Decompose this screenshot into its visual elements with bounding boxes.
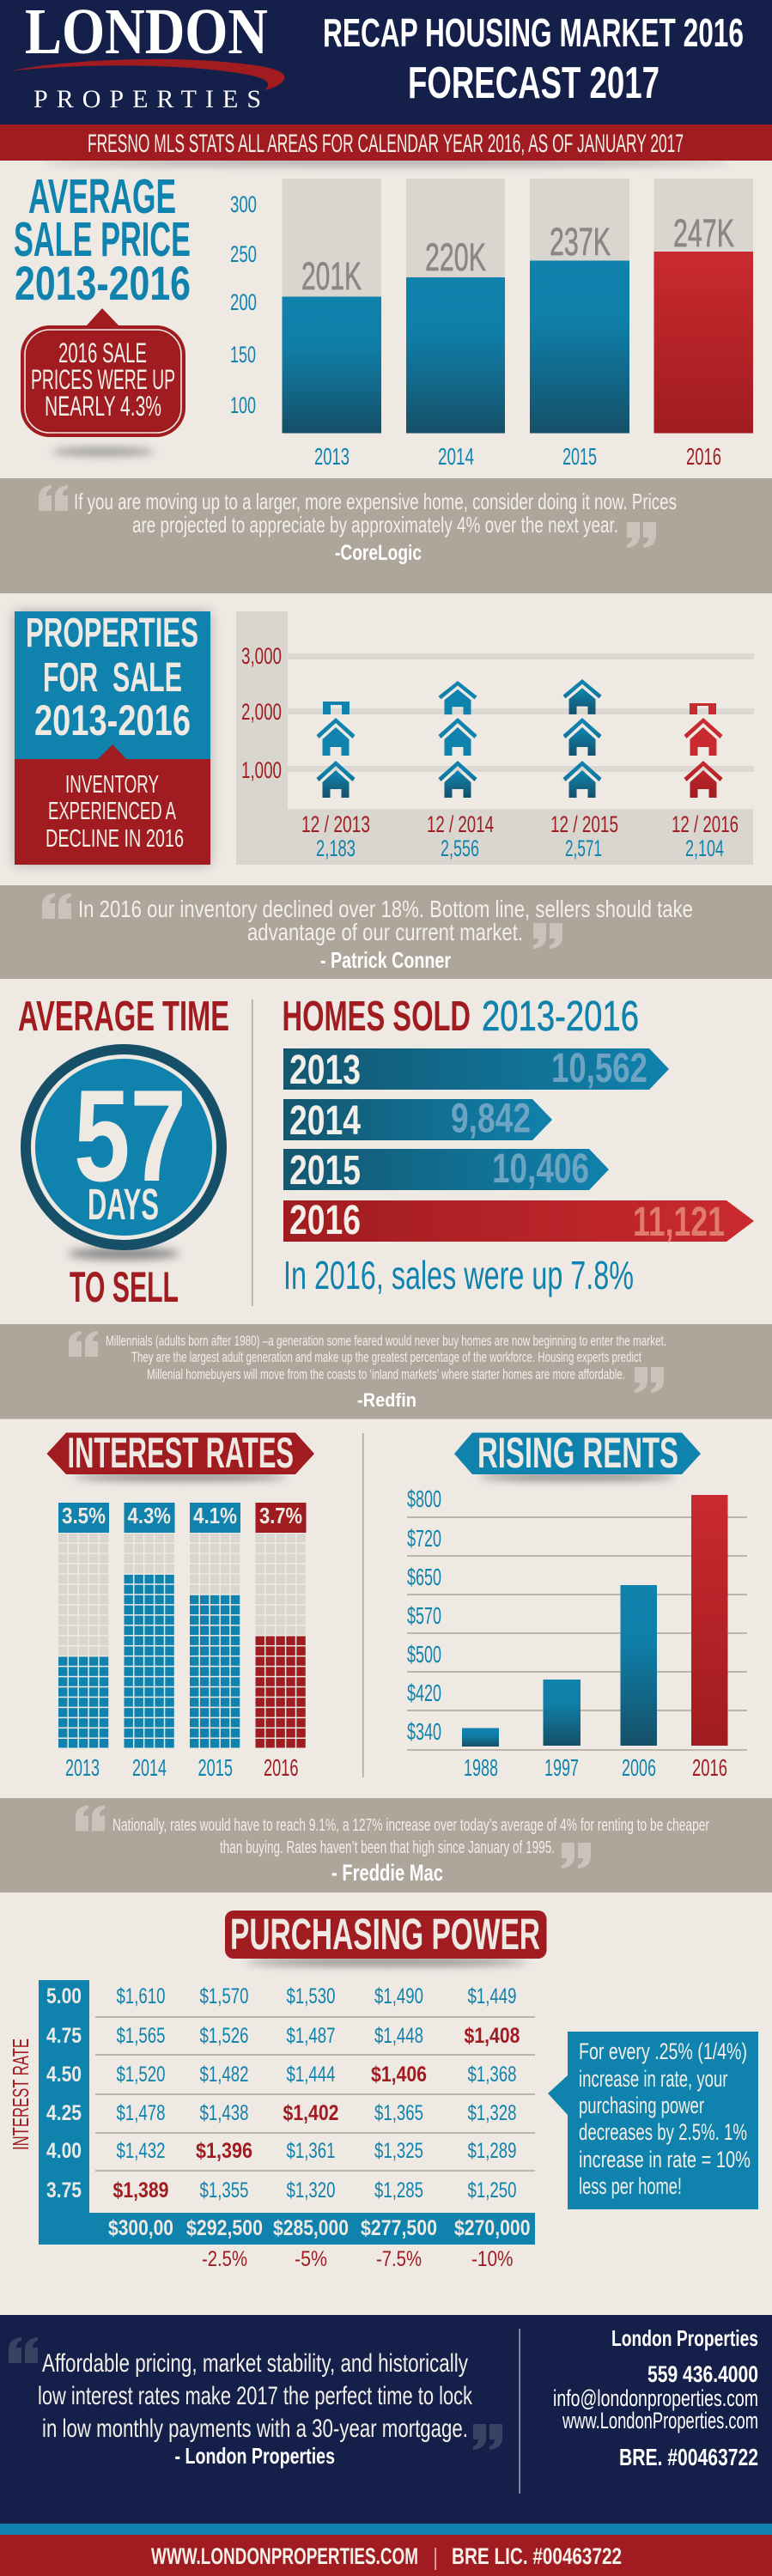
table: purchasing power: -7.5% bbox=[376, 2247, 422, 2271]
arrow bar: 2013 bbox=[283, 1046, 669, 1093]
bar chart: rents: 1997 bbox=[544, 1754, 579, 1781]
title bbox=[323, 10, 744, 108]
panel: interest rates: 2013 bbox=[65, 1754, 100, 1781]
icon: houses 2015 bbox=[563, 679, 601, 798]
footer bar: website and licence bbox=[0, 2535, 772, 2576]
table: purchasing power: $1,250 bbox=[467, 2178, 517, 2202]
footer bar: website and licence: WWW.LONDONPROPERTIES.COM bbox=[151, 2543, 418, 2569]
table: purchasing power: $1,361 bbox=[287, 2139, 335, 2163]
panel: homes sold: In 2016, sales were up 7.8% bbox=[283, 1253, 634, 1297]
box: properties for sale heading: DECLINE IN 2016 bbox=[46, 825, 184, 853]
quote: London Properties bbox=[9, 2337, 502, 2469]
table: purchasing power: $1,565 bbox=[117, 2024, 165, 2048]
panel: average time to sell: AVERAGE TIME bbox=[18, 993, 229, 1040]
callout: 2016 sale prices bbox=[21, 308, 185, 456]
quote: Redfin: -Redfin bbox=[357, 1389, 416, 1411]
waffle chart: 2016 bbox=[256, 1534, 306, 1748]
box: properties for sale heading: PROPERTIES bbox=[26, 611, 198, 656]
bar chart: rents: $420 bbox=[407, 1680, 441, 1706]
callout: rate rule: purchasing power bbox=[579, 2093, 704, 2118]
table: purchasing power: $1,610 bbox=[117, 1984, 165, 2008]
footer panel bbox=[0, 2315, 772, 2524]
rate labels: 4.1% bbox=[193, 1503, 237, 1528]
table: purchasing power: $1,482 bbox=[199, 2063, 249, 2087]
quote: London Properties: - London Properties bbox=[175, 2443, 335, 2469]
quote: Freddie Mac: - Freddie Mac bbox=[331, 1860, 443, 1886]
callout: rate rule bbox=[548, 2032, 758, 2209]
panel: interest rates bbox=[46, 1429, 314, 1781]
quote: Patrick Conner: - Patrick Conner bbox=[320, 947, 451, 973]
quote: London Properties: low interest rates make 2017 the perfect time to lock bbox=[38, 2382, 473, 2410]
table: purchasing power: $1,389 bbox=[113, 2178, 168, 2202]
arrow bar: 2016: 2016 bbox=[289, 1198, 361, 1243]
pictogram chart: inventory: 12 / 2016 bbox=[672, 811, 739, 837]
icon: houses 2016 bbox=[684, 703, 723, 798]
panel: purchasing power bbox=[8, 1910, 758, 2271]
box: properties for sale heading bbox=[15, 611, 210, 865]
rate labels: 3.5% bbox=[62, 1503, 106, 1528]
table: purchasing power: -2.5% bbox=[202, 2247, 247, 2271]
pictogram chart: inventory bbox=[236, 611, 754, 865]
panel: average time to sell: TO SELL bbox=[70, 1263, 179, 1311]
bar chart: average sale price: 2014 bbox=[438, 443, 474, 470]
table: purchasing power: $1,490 bbox=[374, 1984, 423, 2008]
table: purchasing power: $1,289 bbox=[467, 2139, 517, 2163]
pictogram chart: inventory: 2,104 bbox=[685, 835, 724, 861]
arrow bar: 2014: 9,842 bbox=[451, 1096, 531, 1142]
table: purchasing power: $1,570 bbox=[199, 1984, 249, 2008]
table: purchasing power: $1,355 bbox=[199, 2178, 249, 2202]
bar chart: average sale price: 300 bbox=[230, 191, 257, 217]
icon: houses 2013 bbox=[316, 702, 356, 798]
panel: interest rates: 2015 bbox=[198, 1754, 233, 1781]
heading: purchasing power: PURCHASING POWER bbox=[230, 1910, 540, 1959]
arrow bar: 2014 bbox=[283, 1096, 552, 1144]
bar chart: average sale price: 150 bbox=[230, 342, 256, 368]
quote: London Properties: Affordable pricing, market stability, and historically bbox=[42, 2349, 468, 2378]
table: purchasing power: $1,406 bbox=[371, 2063, 427, 2087]
contact details bbox=[553, 2325, 758, 2470]
box: properties for sale heading: 2013-2016 bbox=[34, 696, 191, 744]
arrow bar: 2013: 10,562 bbox=[551, 1046, 647, 1091]
waffle chart: 2014 bbox=[124, 1534, 175, 1748]
table: purchasing power: $1,328 bbox=[467, 2101, 517, 2125]
table: purchasing power: $1,478 bbox=[117, 2101, 165, 2125]
table: purchasing power: $1,285 bbox=[374, 2178, 423, 2202]
bar chart: average sale price: 247K bbox=[673, 211, 734, 255]
table: purchasing power: $1,530 bbox=[287, 1984, 335, 2008]
pictogram chart: inventory: 12 / 2015 bbox=[550, 811, 618, 837]
arrow bar: 2013: 2013 bbox=[289, 1048, 361, 1093]
bar chart: average sale price: 250 bbox=[230, 241, 257, 267]
panel: homes sold bbox=[282, 993, 754, 1297]
table: purchasing power: -5% bbox=[295, 2247, 327, 2271]
table: purchasing power: $1,520 bbox=[117, 2063, 165, 2087]
bar chart: rents: $340 bbox=[407, 1718, 441, 1745]
pictogram chart: inventory: 3,000 bbox=[241, 643, 282, 669]
banner: interest rates bbox=[46, 1429, 314, 1480]
banner: interest rates: INTEREST RATES bbox=[67, 1429, 294, 1477]
heading: homes sold: HOMES SOLD bbox=[282, 993, 471, 1040]
header bbox=[0, 0, 772, 125]
table: purchasing power: $1,487 bbox=[287, 2024, 335, 2048]
table: purchasing power: $277,500 bbox=[361, 2216, 437, 2240]
pictogram chart: inventory: 12 / 2013 bbox=[301, 811, 370, 837]
arrow bar: 2014: 2014 bbox=[289, 1098, 361, 1144]
bar chart: rents: $720 bbox=[407, 1525, 441, 1552]
heading: average sale price: SALE PRICE bbox=[14, 212, 191, 267]
waffle chart: 2015 bbox=[190, 1534, 240, 1748]
logo: London Properties bbox=[9, 0, 284, 113]
badge: 57 days bbox=[21, 1044, 227, 1260]
table: purchasing power: $292,500 bbox=[186, 2216, 263, 2240]
bar chart: rents: $500 bbox=[407, 1641, 441, 1668]
table: purchasing power: $285,000 bbox=[273, 2216, 349, 2240]
box: properties for sale heading: INVENTORY bbox=[65, 771, 159, 799]
quote: Redfin bbox=[0, 1324, 772, 1419]
box: properties for sale heading: FOR SALE bbox=[43, 655, 182, 701]
bar chart: rents: $800 bbox=[407, 1485, 441, 1512]
arrow bar: 2016: 11,121 bbox=[633, 1200, 725, 1245]
table: purchasing power: $1,526 bbox=[199, 2024, 249, 2048]
waffle chart: 2013 bbox=[58, 1534, 109, 1748]
logo: London Properties: PROPERTIES bbox=[33, 85, 261, 113]
callout: 2016 sale prices: 2016 SALE bbox=[58, 337, 147, 368]
table: purchasing power: $300,00 bbox=[108, 2216, 173, 2240]
table: purchasing power: 5.00 bbox=[46, 1984, 82, 2008]
pictogram chart: inventory: 2,571 bbox=[565, 835, 602, 861]
rate labels bbox=[58, 1503, 306, 1533]
table: purchasing power: $1,438 bbox=[199, 2101, 249, 2125]
bar chart: average sale price: 2015 bbox=[562, 443, 597, 470]
bar chart: average sale price: 237K bbox=[550, 220, 611, 264]
title: FORECAST 2017 bbox=[408, 58, 660, 108]
bar chart: average sale price: 220K bbox=[425, 235, 486, 279]
heading: homes sold: 2013-2016 bbox=[482, 993, 639, 1040]
panel: average sale price bbox=[14, 169, 753, 470]
subtitle band bbox=[0, 125, 772, 161]
panel: interest rates: 2014 bbox=[132, 1754, 167, 1781]
table: purchasing power: 4.50 bbox=[46, 2063, 82, 2087]
panel: average time to sell bbox=[18, 993, 229, 1311]
table: purchasing power: $1,444 bbox=[287, 2063, 336, 2087]
table: purchasing power: $1,408 bbox=[464, 2024, 520, 2048]
pictogram chart: inventory: 12 / 2014 bbox=[427, 811, 494, 837]
arrow bar: 2015: 2015 bbox=[289, 1148, 361, 1194]
footer bar: website and licence: BRE LIC. #00463722 bbox=[452, 2543, 622, 2569]
arrow bar: 2015 bbox=[283, 1146, 609, 1194]
bar chart: average sale price bbox=[230, 179, 753, 470]
table: purchasing power: $1,448 bbox=[374, 2024, 423, 2048]
table: purchasing power bbox=[39, 1980, 535, 2271]
callout: 2016 sale prices: NEARLY 4.3% bbox=[45, 391, 161, 422]
heading: average sale price bbox=[14, 169, 191, 310]
table: purchasing power: $270,000 bbox=[454, 2216, 531, 2240]
pictogram chart: inventory: 2,556 bbox=[441, 835, 479, 861]
table: purchasing power: 4.00 bbox=[46, 2139, 82, 2163]
quote: London Properties: in low monthly payments with a 30-year mortgage. bbox=[42, 2415, 468, 2443]
pictogram chart: inventory: 1,000 bbox=[241, 757, 282, 783]
table: purchasing power: $1,368 bbox=[467, 2063, 517, 2087]
badge: 57 days: DAYS bbox=[88, 1180, 159, 1229]
quote: CoreLogic bbox=[0, 478, 772, 593]
callout: rate rule: less per home! bbox=[579, 2173, 682, 2199]
panel: properties for sale bbox=[15, 611, 754, 865]
axis label: interest rate: INTEREST RATE bbox=[8, 2038, 33, 2150]
arrow bar: 2016 bbox=[283, 1198, 754, 1245]
quote: Patrick Conner: advantage of our current market. bbox=[247, 919, 523, 945]
bar chart: rents: 2016 bbox=[692, 1754, 727, 1781]
table: purchasing power: -10% bbox=[471, 2247, 514, 2271]
bar chart: average sale price: 2016 bbox=[686, 443, 721, 470]
table: purchasing power: $1,365 bbox=[374, 2101, 423, 2125]
table: purchasing power: $1,325 bbox=[374, 2139, 423, 2163]
quote: Patrick Conner bbox=[0, 885, 772, 979]
bar chart: average sale price: 100 bbox=[230, 392, 256, 418]
table: purchasing power: 4.25 bbox=[46, 2101, 82, 2125]
quote: Freddie Mac: than buying. Rates haven’t been that high since January of 1995. bbox=[220, 1838, 555, 1857]
table: purchasing power: 4.75 bbox=[46, 2024, 82, 2048]
bar chart: average sale price: 2013 bbox=[314, 443, 350, 470]
arrow bar: 2015: 10,406 bbox=[492, 1146, 589, 1192]
rate labels: 4.3% bbox=[127, 1503, 171, 1528]
table: purchasing power: $1,449 bbox=[467, 1984, 517, 2008]
table: purchasing power: 3.75 bbox=[46, 2178, 82, 2202]
bar chart: average sale price: 200 bbox=[230, 289, 257, 315]
pictogram chart: inventory: 2,000 bbox=[241, 699, 282, 725]
heading: average sale price: 2013-2016 bbox=[15, 256, 191, 310]
table: purchasing power: $1,396 bbox=[196, 2139, 252, 2163]
bar chart: rents: 1988 bbox=[464, 1754, 498, 1781]
quote: CoreLogic: -CoreLogic bbox=[335, 541, 422, 565]
bar chart: rents bbox=[407, 1485, 747, 1781]
panel: interest rates: 2016 bbox=[264, 1754, 299, 1781]
table: purchasing power: $1,320 bbox=[287, 2178, 335, 2202]
bar chart: average sale price: 201K bbox=[301, 254, 362, 298]
table: purchasing power: $1,432 bbox=[117, 2139, 165, 2163]
heading: average sale price: AVERAGE bbox=[28, 169, 176, 224]
callout: 2016 sale prices: PRICES WERE UP bbox=[31, 364, 175, 395]
table: purchasing power: $1,402 bbox=[283, 2101, 338, 2125]
bar chart: rents: $650 bbox=[407, 1564, 441, 1590]
bar chart: rents: 2006 bbox=[622, 1754, 656, 1781]
box: properties for sale heading: EXPERIENCED A bbox=[48, 798, 176, 825]
quote: Freddie Mac bbox=[0, 1798, 772, 1893]
banner: rising rents bbox=[454, 1429, 701, 1480]
pictogram chart: inventory: 2,183 bbox=[316, 835, 356, 861]
rate labels: 3.7% bbox=[259, 1503, 302, 1528]
icon: houses 2014 bbox=[438, 681, 477, 798]
panel: rising rents bbox=[407, 1429, 747, 1781]
bar chart: rents: $570 bbox=[407, 1602, 441, 1629]
badge: 57 days: 57 bbox=[74, 1063, 186, 1209]
heading: purchasing power bbox=[225, 1910, 546, 1965]
